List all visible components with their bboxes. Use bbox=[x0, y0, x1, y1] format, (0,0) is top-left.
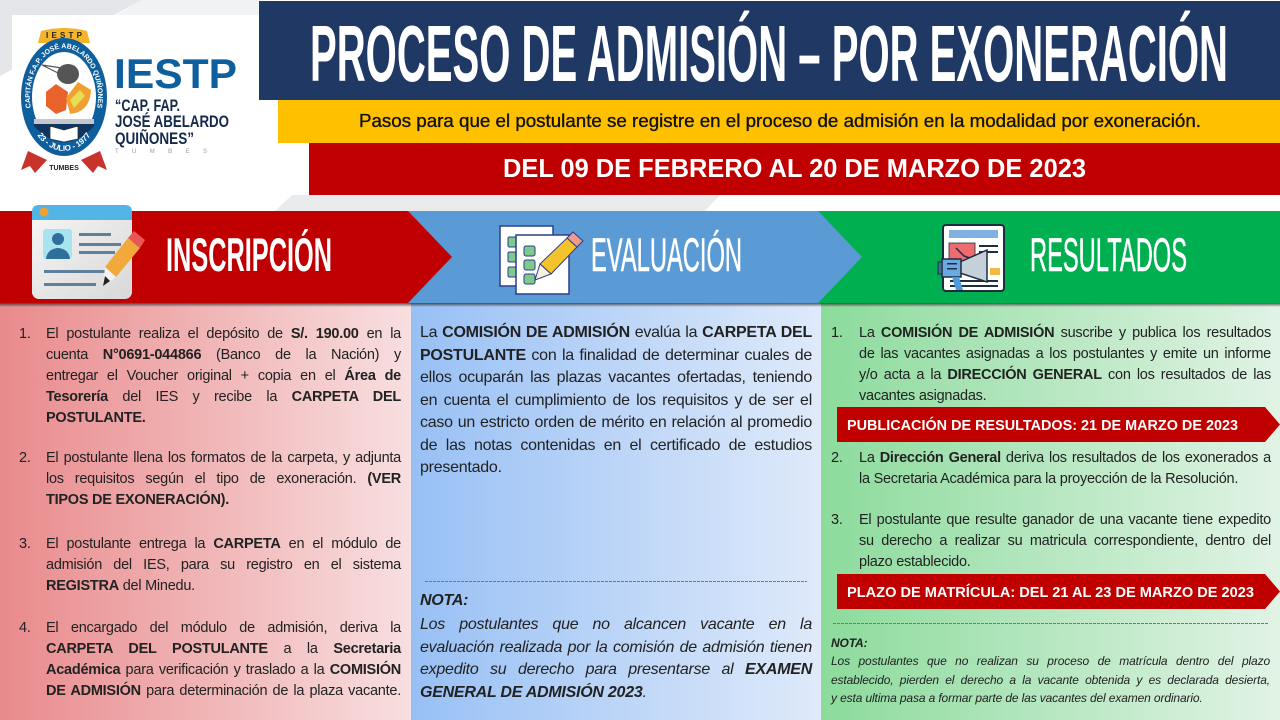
icon: registration card with pencil bbox=[32, 205, 145, 299]
logo: red ribbons bbox=[21, 151, 107, 173]
step 3 inscripción: El postulante entrega la CARPETA en el módulo de bbox=[46, 536, 401, 552]
text: 1. bbox=[19, 326, 31, 342]
step 2 resultados bbox=[831, 450, 1272, 487]
logo: crest ring lettering: CAPITÁN F.A.P. JOSÉ ABELARDO QUIÑONES bbox=[25, 42, 104, 108]
icon: newspaper with megaphone bbox=[938, 225, 1004, 291]
step 1 inscripción: entregar el Voucher original + copia en el Área de bbox=[46, 368, 401, 384]
resultados note: establecido, pierden el derecho a la vacante obtenida y es declarada desierta, bbox=[831, 673, 1270, 687]
step 3 inscripción bbox=[19, 536, 402, 594]
heading: inscripción: INSCRIPCIÓN bbox=[166, 228, 332, 281]
evaluación note bbox=[420, 592, 813, 700]
evaluación note: evaluación realizada por la comisión de admisión tienen bbox=[420, 638, 812, 656]
step 2 inscripción: TIPOS DE EXONERACIÓN). bbox=[46, 492, 229, 508]
step 1 inscripción: POSTULANTE. bbox=[46, 410, 146, 426]
step 1 resultados bbox=[831, 324, 1271, 404]
logo: wordmark: TUMBES bbox=[115, 149, 207, 155]
step 3 resultados bbox=[831, 512, 1271, 570]
resultados note: NOTA: bbox=[831, 636, 867, 650]
logo: crest ring lettering: 23 - JULIO - 1977 bbox=[38, 132, 90, 151]
step 1 inscripción bbox=[19, 326, 402, 426]
evaluación text block: ellos ocuparán las plazas vacantes ofertadas, teniendo bbox=[420, 369, 812, 386]
panel backgrounds bbox=[0, 303, 1280, 720]
header chevrons bbox=[0, 211, 1280, 307]
resultados note: y esta ultima pasa a formar parte de las vacantes del examen ordinario. bbox=[831, 691, 1203, 705]
text: 4. bbox=[19, 620, 31, 636]
step 4 inscripción: DE ADMISIÓN para determinación de la plaza vacante. bbox=[46, 683, 401, 699]
logo: red ribbons: TUMBES bbox=[49, 165, 79, 172]
evaluación note: expedito su derecho para presentarse al EXAMEN bbox=[420, 661, 812, 678]
step 3 resultados: su derecho a realizar su matricula correspondiente, dentro del bbox=[859, 533, 1271, 549]
subtitle bar bbox=[278, 100, 1280, 143]
heading: evaluación: EVALUACIÓN bbox=[591, 228, 742, 281]
step 4 inscripción: Académica para verificación y traslado a la COMISIÓN bbox=[46, 662, 401, 678]
step 4 inscripción: El encargado del módulo de admisión, deriva la bbox=[46, 620, 401, 636]
logo: crest ring bbox=[21, 38, 107, 156]
resultados note: Los postulantes que no realizan su proceso de matrícula dentro del plazo bbox=[831, 654, 1270, 668]
step 2 resultados: La Dirección General deriva los resultados de los exonerados a bbox=[859, 450, 1271, 466]
step 4 inscripción bbox=[19, 620, 402, 699]
callout: plazo de matrícula bbox=[837, 574, 1280, 609]
resultados note bbox=[830, 636, 1270, 705]
text: 2. bbox=[831, 450, 843, 466]
logo: wordmark: “CAP. FAP. bbox=[115, 97, 180, 115]
logo: wordmark: JOSÉ ABELARDO bbox=[115, 112, 229, 131]
step 4 inscripción: CARPETA DEL POSTULANTE a la Secretaria bbox=[46, 641, 401, 657]
decorative background facets bbox=[0, 0, 720, 211]
subtitle bar: Pasos para que el postulante se registre en el proceso de admisión en la modalidad por exoneración. bbox=[359, 111, 1201, 131]
step 3 inscripción: REGISTRA del Minedu. bbox=[46, 578, 195, 594]
date bar bbox=[309, 143, 1280, 195]
evaluación note: GENERAL DE ADMISIÓN 2023. bbox=[420, 684, 647, 700]
date bar: DEL 09 DE FEBRERO AL 20 DE MARZO DE 2023 bbox=[503, 153, 1086, 183]
evaluación text block: de las notas contenidas en el certificado de estudios bbox=[420, 436, 812, 454]
step 2 inscripción: los requisitos según el tipo de exoneración. (VER bbox=[46, 471, 401, 487]
step 3 inscripción: admisión del IES, para su registro en el sistema bbox=[46, 557, 401, 573]
logo: wordmark: QUIÑONES” bbox=[115, 128, 194, 148]
text: 2. bbox=[19, 450, 31, 466]
logo: crest ring lettering bbox=[25, 42, 104, 151]
step 1 inscripción: cuenta N°0691-044866 (Banco de la Nación) y bbox=[46, 347, 401, 363]
evaluación text block: La COMISIÓN DE ADMISIÓN evalúa la CARPETA DEL bbox=[420, 324, 812, 341]
evaluación text block: caso un estricto orden de mérito en relación al promedio bbox=[420, 414, 812, 431]
step 3 resultados: El postulante que resulte ganador de una vacante tiene expedito bbox=[859, 512, 1271, 528]
step 1 inscripción: Tesorería del IES y recibe la CARPETA DEL bbox=[46, 389, 401, 405]
callout: publicación de resultados: PUBLICACIÓN DE RESULTADOS: 21 DE MARZO DE 2023 bbox=[847, 416, 1238, 434]
callout: publicación de resultados bbox=[837, 407, 1280, 442]
step 2 inscripción: El postulante llena los formatos de la carpeta, y adjunta bbox=[46, 450, 401, 466]
step 1 resultados: y/o acta a la DIRECCIÓN GENERAL con los resultados de las bbox=[859, 367, 1271, 383]
logo: wordmark: IESTP bbox=[114, 50, 237, 97]
step 3 resultados: plazo establecido. bbox=[859, 554, 971, 570]
evaluación note: Los postulantes que no alcancen vacante en la bbox=[420, 616, 812, 633]
evaluación text block bbox=[420, 322, 812, 476]
step 1 resultados: de las vacantes asignadas a los postulantes y emite un informe bbox=[859, 346, 1271, 362]
step 2 resultados: la Secretaria Académica para la proyección de la Resolución. bbox=[859, 471, 1238, 487]
evaluación text block: en cuenta el cumplimiento de los requisitos y de ser el bbox=[420, 392, 812, 408]
logo: wordmark bbox=[114, 50, 237, 155]
callout: plazo de matrícula: PLAZO DE MATRÍCULA: DEL 21 AL 23 DE MARZO DE 2023 bbox=[847, 584, 1254, 601]
text: 3. bbox=[19, 536, 31, 552]
evaluación text block: presentado. bbox=[420, 459, 502, 476]
step 2 inscripción bbox=[19, 450, 402, 508]
icon: checklist with pencil bbox=[500, 226, 583, 294]
evaluación text block: POSTULANTE con la finalidad de determinar cuales de bbox=[420, 346, 812, 364]
step 1 resultados: vacantes asignadas. bbox=[859, 388, 986, 404]
text: 3. bbox=[831, 512, 843, 528]
logo: top IESTP tab: IESTP bbox=[46, 31, 83, 40]
logo block bbox=[12, 15, 237, 173]
logo: top IESTP tab bbox=[38, 28, 90, 43]
evaluación note: NOTA: bbox=[420, 592, 468, 609]
step 1 inscripción: El postulante realiza el depósito de S/. 190.00 en la bbox=[46, 326, 401, 342]
step 1 resultados: La COMISIÓN DE ADMISIÓN suscribe y publica los resultados bbox=[859, 325, 1271, 341]
text: 1. bbox=[831, 325, 843, 341]
